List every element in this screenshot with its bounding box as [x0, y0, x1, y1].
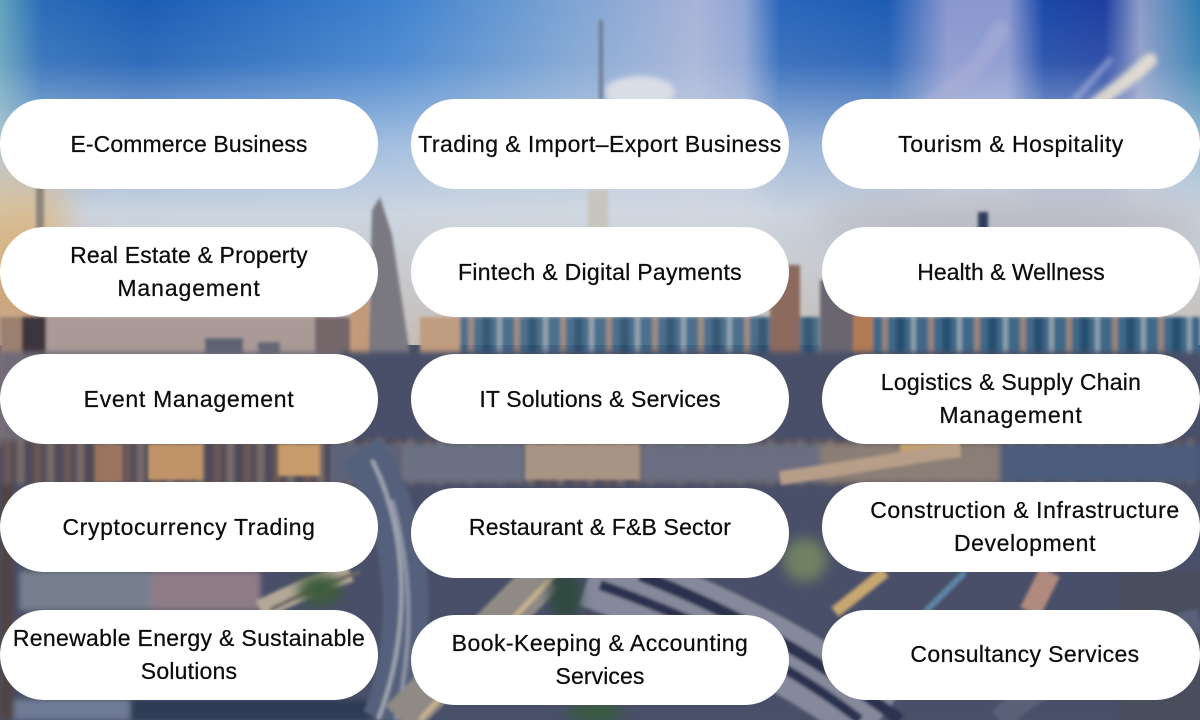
row 2, column 1: Real Estate & Property Management: Management — [117, 275, 261, 301]
row 3, column 3: Logistics & Supply Chain Management: Management — [939, 402, 1083, 428]
row 2, column 2: Fintech & Digital Payments — [411, 227, 789, 317]
row 5, column 2: Book-Keeping & Accounting Services — [411, 615, 789, 705]
row 5, column 3: Consultancy Services: Consultancy Services — [910, 640, 1140, 666]
row 5, column 2: Book-Keeping & Accounting Services: Book-Keeping & Accounting — [452, 630, 748, 656]
row 1, column 3: Tourism & Hospitality: Tourism & Hospitality — [898, 130, 1124, 156]
ground — [0, 352, 1200, 720]
row 3, column 2: IT Solutions & Services — [411, 354, 789, 444]
row 2, column 1: Real Estate & Property Management — [0, 227, 378, 317]
row 3, column 1: Event Management: Event Management — [84, 386, 294, 412]
row 2, column 3: Health & Wellness: Health & Wellness — [917, 258, 1105, 284]
row 1, column 1: E-Commerce Business: E-Commerce Business — [70, 130, 308, 156]
row 4, column 3: Construction & Infrastructure Development — [822, 482, 1200, 572]
row 1, column 1: E-Commerce Business — [0, 99, 378, 189]
sky — [0, 0, 1200, 345]
row 1, column 3: Tourism & Hospitality — [822, 99, 1200, 189]
row 4, column 1: Cryptocurrency Trading — [0, 482, 378, 572]
row 4, column 1: Cryptocurrency Trading: Cryptocurrency Trading — [62, 514, 316, 540]
row 3, column 1: Event Management — [0, 354, 378, 444]
row 5, column 2: Book-Keeping & Accounting Services: Services — [556, 663, 644, 689]
row 2, column 3: Health & Wellness — [822, 227, 1200, 317]
row 1, column 2: Trading & Import-Export Business — [411, 99, 789, 189]
row 1, column 2: Trading & Import-Export Business: Trading & Import–Export Business — [418, 130, 782, 156]
row 2, column 2: Fintech & Digital Payments: Fintech & Digital Payments — [458, 258, 742, 284]
row 5, column 1: Renewable Energy & Sustainable Solutions: Solutions — [141, 658, 237, 684]
row 2, column 1: Real Estate & Property Management: Real Estate & Property — [70, 242, 308, 268]
row 4, column 2: Restaurant & F&B Sector — [411, 488, 789, 578]
row 5, column 1: Renewable Energy & Sustainable Solutions — [0, 610, 378, 700]
row 4, column 2: Restaurant & F&B Sector: Restaurant & F&B Sector — [469, 514, 731, 540]
row 3, column 2: IT Solutions & Services: IT Solutions & Services — [479, 386, 721, 412]
row 4, column 3: Construction & Infrastructure Development: Development — [954, 530, 1096, 556]
row 4, column 3: Construction & Infrastructure Development: Construction & Infrastructure — [870, 497, 1180, 523]
row 3, column 3: Logistics & Supply Chain Management: Logistics & Supply Chain — [881, 369, 1141, 395]
row 5, column 3: Consultancy Services — [822, 610, 1200, 700]
row 3, column 3: Logistics & Supply Chain Management — [822, 354, 1200, 444]
row 5, column 1: Renewable Energy & Sustainable Solutions: Renewable Energy & Sustainable — [13, 625, 365, 651]
